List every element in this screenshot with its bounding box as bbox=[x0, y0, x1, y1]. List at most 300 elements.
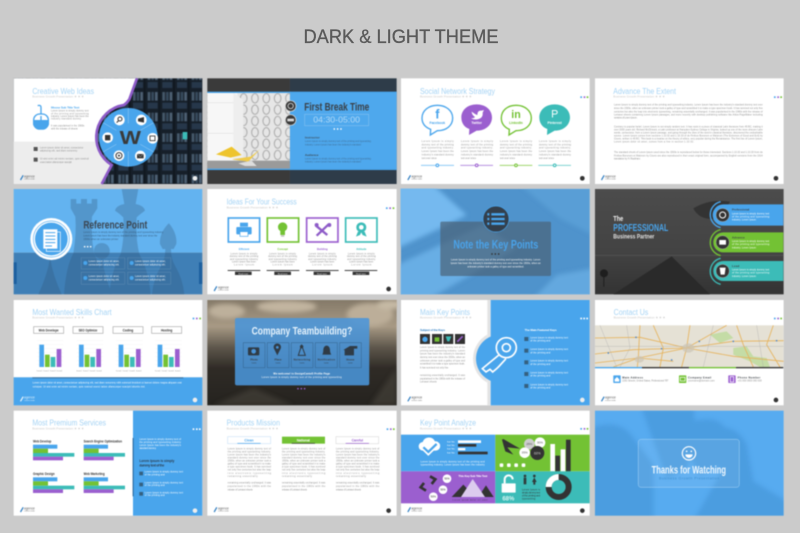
text block: Lorem Ipsum is simply dummy text of the printing and typesetting industry. Lorem bbox=[451, 259, 540, 262]
logo bbox=[407, 506, 422, 513]
contact: email: yourname@domain.com bbox=[688, 379, 715, 382]
text columns: text ever since bbox=[539, 157, 555, 160]
text column 1: not only five centuries but also the leap bbox=[228, 469, 272, 472]
chart: Web Marketing bbox=[84, 472, 125, 493]
logo: agence bbox=[218, 285, 229, 289]
card: Building: Read more bbox=[317, 272, 328, 275]
text column 2: Lorem Ipsum has been the industry's bbox=[282, 454, 326, 457]
paragraph 1: since the 1500s, when an unknown printer took a galley of type and scrambled it to make a type specimen book. It has survived not only five bbox=[614, 107, 763, 110]
card: Concept: Lorem Ipsum has been bbox=[271, 261, 295, 264]
card: Attitude: and typesetting industry bbox=[347, 258, 376, 261]
tab: Clean bbox=[228, 437, 271, 444]
item: Professional bbox=[710, 202, 783, 228]
photo: white room bbox=[207, 93, 290, 169]
text column 3 bbox=[336, 447, 380, 492]
text column 1: Lorem Ipsum has been the industry's bbox=[228, 454, 272, 457]
checklist: of the printing and bbox=[530, 387, 551, 390]
card: Building: dummy text of the printing bbox=[308, 255, 337, 258]
text column 2: into electronic typesetting bbox=[282, 472, 326, 475]
text column 3: remaining essentially bbox=[336, 475, 367, 478]
card: Efficient: Lorem Ipsum is simply bbox=[231, 252, 258, 255]
page badge bbox=[193, 508, 197, 513]
item: Advance: industry. Lorem Ipsum bbox=[732, 246, 756, 249]
chart: Search Engine Optimization bbox=[84, 439, 125, 460]
chart: Web Developer: Item1 Item2 Item3 Item4 bbox=[37, 370, 62, 373]
tile: Place bbox=[267, 343, 289, 368]
checklist bbox=[139, 470, 183, 497]
tile: House bbox=[340, 343, 361, 368]
bubble: LinkedIn: in bbox=[511, 109, 521, 121]
icon: document badge bbox=[30, 218, 72, 260]
pager dots bbox=[84, 246, 91, 247]
chart: Web Develop bbox=[33, 439, 74, 460]
contact: email bbox=[679, 375, 715, 383]
text columns: industry's standard dummy bbox=[539, 153, 572, 156]
chart: Web Developer bbox=[34, 327, 64, 373]
text columns: text ever since bbox=[422, 157, 437, 160]
panel: Social Network Strategy slide bbox=[401, 78, 590, 184]
logo: creative studio bbox=[24, 510, 35, 513]
subtitle: Business Growth Presentation ★ ★ ★ bbox=[420, 316, 472, 320]
block: purple chain: 50% bbox=[440, 488, 446, 492]
intro text: standard dummy bbox=[139, 447, 157, 450]
text column 3: a type specimen book. It has survived bbox=[336, 466, 380, 469]
colour dots bbox=[774, 96, 782, 98]
text column 3: remaining essentially unchanged. It was bbox=[336, 482, 380, 485]
photo: clouds and city bbox=[208, 300, 403, 405]
text columns: and typesetting industry. bbox=[461, 147, 493, 150]
logo: agence bbox=[218, 506, 229, 510]
map bbox=[595, 325, 784, 367]
card: Concept: Read more bbox=[278, 272, 288, 275]
title: DARK & LIGHT THEME bbox=[304, 27, 498, 48]
text column 3: release of Letraset sheets bbox=[336, 489, 362, 492]
icon: smiley bbox=[682, 447, 696, 460]
text column 1: popularised in the 1960s with the bbox=[228, 485, 272, 488]
paragraph 2: Lorem ipsum dolor sit amet, comes from a line in section 1.10.32. bbox=[614, 141, 694, 144]
text columns: Lorem Ipsum is simply bbox=[461, 140, 494, 143]
tab: Careful: Careful bbox=[352, 438, 363, 442]
subtitle: Business Growth Presentation bbox=[659, 477, 719, 481]
text column 2: a type specimen book. It has survived bbox=[282, 466, 326, 469]
feature boxes: Lorem ipsum dolor sit amet, bbox=[89, 275, 120, 278]
heading: Contact Us bbox=[614, 308, 648, 317]
paragraph 1 bbox=[614, 104, 763, 120]
heading: Ideas For Your Success bbox=[227, 198, 297, 207]
text: instructor: Lorem Ipsum is simply dummy text of the printing and typesetting bbox=[305, 140, 372, 143]
bubble: Facebook: f bbox=[435, 108, 440, 122]
heading: Advance The Extent bbox=[613, 87, 677, 96]
left text: remaining essentially unchanged. It was bbox=[420, 374, 466, 377]
heading bbox=[613, 214, 668, 240]
card: Concept: dummy text of the printing bbox=[268, 255, 298, 258]
callout heading: dummy text of the bbox=[139, 464, 164, 468]
text columns: dummy text of the printing bbox=[422, 143, 454, 146]
checklist: Lorem Ipsum is simply dummy text bbox=[530, 348, 568, 351]
text column 1: into electronic typesetting bbox=[228, 472, 272, 475]
chart: Coding bbox=[113, 327, 143, 373]
logo bbox=[20, 396, 35, 402]
logo: creative studio bbox=[218, 510, 229, 513]
left text: scrambled it to make a type specimen book. bbox=[420, 363, 465, 366]
logo: agence bbox=[605, 396, 616, 400]
contact: phone: Phone Number bbox=[738, 375, 760, 379]
block: purple chain: 50% bbox=[431, 495, 437, 499]
text columns: and typesetting industry. bbox=[539, 147, 571, 150]
logo: creative studio bbox=[218, 289, 229, 292]
text: instructor: industry. Lorem Ipsum has been the industry's standard bbox=[305, 143, 362, 146]
bubble: Facebook bbox=[422, 105, 453, 135]
checklist bbox=[34, 146, 89, 164]
text column 2: release of Letraset sheets bbox=[282, 489, 308, 492]
colour dots bbox=[774, 318, 782, 319]
intro text: Lorem Ipsum is simply dummy text of bbox=[139, 438, 181, 441]
heading: PROFESSIONAL bbox=[613, 223, 668, 234]
text column 1: Lorem Ipsum is simply dummy text of bbox=[228, 447, 271, 450]
text columns: Lorem Ipsum has been the bbox=[461, 150, 494, 153]
heading: Company Teambuilding? bbox=[252, 326, 352, 338]
item: Lead: industry. Lorem Ipsum bbox=[732, 275, 756, 278]
block: purple chain: This Key Sub Title Text bbox=[458, 474, 487, 478]
checklist: of the printing and bbox=[145, 494, 165, 497]
block: green percentages bbox=[495, 435, 590, 471]
checklist: Lorem Ipsum is simply dummy text bbox=[530, 371, 568, 374]
logo bbox=[407, 174, 422, 181]
bubble: Pinterest: Pinterest bbox=[548, 121, 563, 125]
block: teal lock and donut: typesetting bbox=[522, 497, 536, 500]
card: Building: Building bbox=[317, 247, 328, 251]
key thumbnails bbox=[420, 334, 465, 344]
text columns: dummy text of the printing bbox=[500, 143, 533, 146]
left text: Letraset sheets bbox=[420, 381, 437, 384]
item: Professional: industry. Lorem Ipsum bbox=[732, 219, 756, 222]
tile: Networking: Lorem bbox=[300, 363, 305, 365]
subtitle: Business Growth Presentation ★ ★ ★ bbox=[614, 316, 666, 320]
item: Lead: Lorem Ipsum is simply dummy text bbox=[732, 269, 770, 272]
pager dots bbox=[297, 388, 305, 389]
heading: First Break Time bbox=[304, 101, 369, 113]
heading: Thanks for Watching bbox=[652, 464, 726, 476]
block: teal lock and donut: of the printing and bbox=[522, 494, 541, 497]
callout panel bbox=[235, 318, 369, 385]
photo: smiling faces bbox=[592, 408, 787, 521]
feature boxes: consectetuer adipiscing elit. bbox=[135, 263, 166, 266]
logo: creative studio bbox=[411, 178, 422, 181]
panel: Most Wanted Skills Chart slide bbox=[14, 300, 202, 405]
side tabs bbox=[14, 262, 202, 284]
paragraph 3: translation by H. Rackham. bbox=[614, 158, 641, 161]
text column 2 bbox=[282, 447, 326, 492]
logo: agence bbox=[24, 396, 35, 400]
block: teal lock and donut bbox=[495, 471, 590, 503]
checklist: Lorem Ipsum is simply dummy text bbox=[530, 360, 568, 363]
panel: Key Point Analyze slide bbox=[401, 411, 590, 516]
welcome text: We welcome! to DesignCanteS Profile Page bbox=[273, 372, 330, 376]
logo bbox=[214, 285, 229, 292]
tile: Notification: Lorem bbox=[324, 363, 329, 365]
text column 2: galley of type and scrambled it to make bbox=[282, 463, 326, 466]
logo: creative studio bbox=[24, 178, 35, 181]
panel: Reference Point slide bbox=[14, 189, 202, 294]
text columns: Lorem Ipsum is simply bbox=[539, 140, 572, 143]
chart: Web Develop: Web Develop bbox=[33, 439, 52, 443]
tab: Careful bbox=[336, 437, 379, 444]
logo bbox=[214, 506, 229, 513]
panel: Most Premium Services slide bbox=[14, 411, 202, 516]
contact: address: 2201 Streetn, United States, Professional 787 bbox=[622, 379, 669, 382]
checklist: Ut wisi enim ad minim veniam, quis nostrud bbox=[40, 157, 89, 160]
intro text bbox=[139, 438, 182, 450]
block: green percentages: 25% bbox=[526, 442, 533, 446]
callout panel bbox=[440, 222, 551, 276]
dots bbox=[580, 318, 588, 319]
logo: creative studio bbox=[24, 399, 35, 402]
text block: mouse sub title: It was popularised in the 1960s bbox=[51, 125, 85, 128]
text: instructor bbox=[305, 136, 372, 146]
chart: Coding: Item1 Item2 Item3 Item4 bbox=[116, 370, 141, 373]
card: Efficient bbox=[228, 218, 260, 275]
text block: mouse sub title: Mouse Sub Title Text bbox=[51, 105, 79, 109]
key badge bbox=[473, 335, 524, 383]
subtitle: Business Growth Presentation ★ ★ ★ bbox=[420, 95, 472, 99]
text columns: dummy text of the printing bbox=[539, 143, 572, 146]
time box bbox=[305, 114, 369, 126]
card: Concept: Concept bbox=[277, 247, 288, 251]
text columns: Lorem Ipsum has been the bbox=[422, 150, 454, 153]
left text: Lorem Ipsum is simply dummy text of the bbox=[420, 346, 466, 349]
text columns: Lorem Ipsum is simply bbox=[422, 140, 454, 143]
paragraph 1: centuries but also the leap into electronic typesetting, remaining essentially unchanged. It was popularised in the 1960s with the release of bbox=[614, 110, 763, 113]
text columns: Lorem Ipsum has been the bbox=[539, 150, 572, 153]
text column 2: popularised in the 1960s with the bbox=[282, 485, 326, 488]
paragraph 2 bbox=[614, 126, 763, 144]
footer text: volutpat. Ut wisi enim ad minim veniam, quis nostrud exerci tation ullamcorper suscipit lobortis nisl. bbox=[33, 386, 146, 389]
page badge bbox=[193, 398, 197, 402]
logo bbox=[601, 396, 616, 402]
contact: email: Company Email bbox=[688, 375, 712, 379]
heading: Social Network Strategy bbox=[420, 87, 495, 96]
panel: Products Mission slide bbox=[207, 411, 397, 516]
tile: Networking: Networking bbox=[294, 358, 311, 362]
text: instructor: Instructor bbox=[305, 136, 320, 140]
colour dots bbox=[193, 318, 201, 319]
panel: Advance The Extent slide bbox=[595, 78, 784, 184]
text column 3: not only five centuries but also the leap bbox=[336, 469, 380, 472]
photo: chess pieces bbox=[38, 189, 184, 294]
bubble: LinkedIn: LinkedIn bbox=[509, 121, 523, 125]
colour dots bbox=[580, 428, 588, 430]
panel: The Professional Business Partner slide bbox=[595, 189, 784, 294]
heading: Reference Point bbox=[83, 219, 147, 231]
paragraph 3: The standard chunk of Lorem Ipsum used since the 1500s is reproduced below for those interested. Sections 1.10.32 and 1.10.33 from de bbox=[614, 151, 763, 154]
text column 1: release of Letraset sheets bbox=[228, 489, 253, 492]
text column 1 bbox=[228, 447, 272, 492]
checklist: of the printing and bbox=[530, 375, 551, 378]
callout panel bbox=[638, 439, 739, 487]
heading: Key Point Analyze bbox=[420, 419, 476, 428]
heading: Note the Key Points bbox=[453, 238, 539, 252]
paragraph 2: Cicero, written in 45 BC. This book is a treatise on the theory of ethics, very popular during the Renaissance. The first line of Lorem Ipsum, bbox=[614, 138, 763, 141]
text block: mouse sub title bbox=[51, 105, 89, 130]
heading: Products Mission bbox=[227, 419, 280, 428]
paragraph 2: words, consectetur, from a Lorem Ipsum passage, and going through the cites of the word in classical literature, discovered the undoubtable bbox=[614, 132, 763, 135]
card: Attitude: Read more bbox=[356, 272, 367, 275]
text column 3: galley of type and scrambled it to make bbox=[336, 463, 380, 466]
card: Attitude bbox=[345, 218, 377, 275]
text column 1: remaining essentially unchanged. It was bbox=[228, 482, 272, 485]
heading: Main Key Points bbox=[420, 308, 470, 317]
left text: It has survived not only five bbox=[420, 367, 449, 370]
checklist: of the printing and bbox=[530, 351, 551, 354]
welcome text: Lorem Ipsum is simply dummy text of the printing and typesetting bbox=[262, 376, 342, 379]
text block: mouse sub title: with the release of sheets bbox=[51, 127, 78, 130]
panel: Main Key Points slide bbox=[401, 300, 590, 405]
card: Efficient: dummy text of the printing bbox=[230, 255, 259, 258]
card: Attitude: Lorem Ipsum has been bbox=[349, 261, 374, 264]
paragraph 3: Finibus Bonorum et Malorum by Cicero are also reproduced in their exact original form, accompanied by English versions from the 1914 bbox=[614, 154, 763, 157]
tile: Photo bbox=[243, 343, 265, 368]
tab: National bbox=[282, 437, 325, 444]
panel: Thanks for Watching slide bbox=[592, 408, 787, 521]
left text: Ipsum has been the industry's standard bbox=[420, 353, 466, 356]
checklist: adipiscing elit, sed diam nonummy bbox=[40, 149, 78, 152]
colour dots bbox=[386, 207, 394, 209]
text column 2: standard dummy text ever since the bbox=[282, 457, 326, 460]
text column 3: standard dummy text ever since the bbox=[336, 457, 380, 460]
text columns: dummy text of the printing bbox=[461, 143, 494, 146]
text block: Lorem Ipsum is simply dummy text of the printing and typesetting industry bbox=[83, 231, 164, 234]
logo: creative studio bbox=[411, 399, 422, 402]
tile: Notification bbox=[315, 343, 337, 368]
paragraph 2: source. Lorem Ipsum comes from sections 1.10.32 and 1.10.33 of de Finibus Bonorum et Malorum (The Extremes of Good and Evil) by bbox=[614, 135, 763, 138]
contact: phone bbox=[728, 375, 762, 383]
panel: Contact Us slide bbox=[595, 300, 784, 405]
item: Professional: Professional bbox=[732, 208, 750, 212]
footer text bbox=[33, 382, 182, 389]
card: Efficient: Lorem Ipsum has been bbox=[232, 261, 257, 264]
card: Building: and typesetting industry bbox=[308, 258, 337, 261]
tile: Place: Place bbox=[274, 358, 282, 362]
checklist: of the printing and bbox=[530, 340, 551, 343]
paragraph 3 bbox=[614, 151, 763, 161]
footer text: Lorem ipsum dolor sit amet, consectetuer adipiscing elit, sed diam nonummy nibh euismod tincidunt ut laoreet dolore magna aliquam erat bbox=[33, 382, 182, 385]
feature boxes bbox=[81, 258, 171, 284]
text columns: text ever since bbox=[461, 157, 477, 160]
heading: Most Premium Services bbox=[32, 419, 106, 428]
text column 3: into electronic typesetting bbox=[336, 472, 380, 475]
icon: clock bbox=[285, 101, 296, 111]
bubble: Facebook: Facebook bbox=[430, 121, 445, 125]
card: Concept: Lorem Ipsum bbox=[273, 264, 293, 267]
right heading: The Main Featured Keys bbox=[525, 328, 557, 332]
colour dots bbox=[580, 96, 588, 98]
left text bbox=[420, 346, 466, 384]
paragraph 1: Letraset sheets containing Lorem Ipsum passages, and more recently with desktop publishing software like Aldus PageMaker including bbox=[614, 113, 763, 116]
tile: Notification: Notification bbox=[318, 358, 335, 362]
text block: Ipsum has been the industry's standard dummy text ever since the 1500s, when an bbox=[451, 262, 541, 265]
subtitle: Business Growth Presentation ★ ★ ★ bbox=[613, 95, 665, 99]
paragraph 2: over 2000 years old. Richard McClintock, a Latin professor at Hampden-Sydney College in Virginia, looked up one of the more obscure Latin bbox=[614, 129, 763, 132]
bubble: Pinterest bbox=[539, 104, 570, 135]
block: purple chain: Lorem ipsum dolor sit amet bbox=[453, 499, 488, 502]
photo: hands and clipboard bbox=[397, 185, 593, 298]
text column 1: a type specimen book. It has survived bbox=[228, 466, 272, 469]
text: audience bbox=[305, 153, 372, 164]
text column 1: remaining essentially bbox=[228, 475, 258, 478]
text column 2: the printing and typesetting industry. bbox=[282, 451, 326, 454]
text columns bbox=[422, 140, 572, 160]
text column 3: popularised in the 1960s with the bbox=[336, 485, 380, 488]
feature boxes: consectetuer adipiscing elit. bbox=[135, 278, 166, 281]
heading: Creative Web Ideas bbox=[32, 87, 94, 96]
chart: Hosting: Item1 Item2 Item3 Item4 bbox=[155, 370, 180, 373]
icon: tray bbox=[285, 115, 296, 125]
paragraph 1: versions of Lorem Ipsum. bbox=[614, 117, 638, 120]
text column 2: 1500s, when an unknown printer took a bbox=[282, 460, 326, 463]
feature boxes: Lorem ipsum dolor sit amet, bbox=[135, 275, 166, 278]
paragraph 1: Lorem Ipsum is simply dummy text of the printing and typesetting industry. Lorem Ipsum has been the industry's standard dummy text ever bbox=[614, 104, 763, 107]
bubble: Twitter bbox=[461, 104, 492, 135]
block: teal lock and donut: 68% bbox=[502, 496, 515, 502]
text column 3: Lorem Ipsum has been the industry's bbox=[336, 454, 380, 457]
text columns: text ever since bbox=[500, 157, 516, 160]
chart: Web Marketing: Web Marketing bbox=[84, 472, 105, 476]
pager dots bbox=[491, 253, 499, 255]
chart: Search Engine Optimization: Search Engine Optimization bbox=[84, 439, 122, 443]
item: Advance: Advance bbox=[732, 235, 745, 239]
card: Concept: and typesetting industry bbox=[269, 258, 297, 261]
tile: Photo: Lorem bbox=[252, 363, 257, 365]
timeline markers bbox=[421, 164, 571, 167]
block: teal lock and donut: Lorem Ipsum is bbox=[522, 488, 541, 491]
item: Advance: of the printing and typesetting bbox=[732, 243, 770, 246]
tab: Clean: Clean bbox=[244, 438, 254, 442]
text block: unknown printer took a galley of type and scrambled. bbox=[467, 266, 524, 269]
block: purple chain bbox=[401, 471, 495, 503]
feature boxes: consectetuer adipiscing elit. bbox=[89, 278, 120, 281]
page badge bbox=[774, 398, 778, 402]
icon: list badge bbox=[483, 206, 509, 232]
tab: National: National bbox=[297, 438, 310, 442]
block: blue bar list: Sub Title bbox=[447, 444, 456, 447]
logo bbox=[407, 396, 422, 402]
item: Lead: Lead bbox=[732, 264, 740, 268]
left text: printing and typesetting industry. Lorem bbox=[420, 349, 465, 352]
blue panel bbox=[290, 93, 397, 169]
text column 1: standard dummy text ever since the bbox=[228, 457, 272, 460]
text columns: and typesetting industry. bbox=[500, 147, 532, 150]
chart: Graphic Design bbox=[33, 472, 74, 493]
subtitle: Business Growth Presentation ★ ★ ★ bbox=[227, 426, 279, 430]
block: purple chain: 50% bbox=[444, 477, 450, 481]
left text: unknown printer took a galley of type and bbox=[420, 359, 466, 362]
heading: Business Partner bbox=[613, 233, 655, 240]
bubble: Twitter: Twitter bbox=[471, 121, 483, 125]
chart: SEO Optimize: SEO Optimize bbox=[79, 329, 97, 333]
pager dots bbox=[333, 128, 342, 130]
checklist: exerci tation ullamcorper suscipit bbox=[40, 161, 72, 164]
chart: SEO Optimize: Item1 Item2 Item3 Item4 bbox=[76, 370, 102, 373]
page badge bbox=[386, 287, 391, 291]
checklist: of the printing and bbox=[145, 473, 165, 476]
page badge bbox=[580, 508, 585, 513]
paragraph 2: Contrary to popular belief, Lorem Ipsum is not simply random text. It has roots in a piece of classical Latin literature from 45 BC, making it bbox=[614, 126, 763, 129]
diagram: blue wheel: W bbox=[120, 127, 141, 148]
logo: agence bbox=[24, 174, 35, 178]
callout heading: Lorem Ipsum is simply bbox=[139, 459, 174, 463]
block: green percentages: 35% bbox=[522, 451, 528, 455]
text column 3: the printing and typesetting industry. bbox=[336, 451, 380, 454]
